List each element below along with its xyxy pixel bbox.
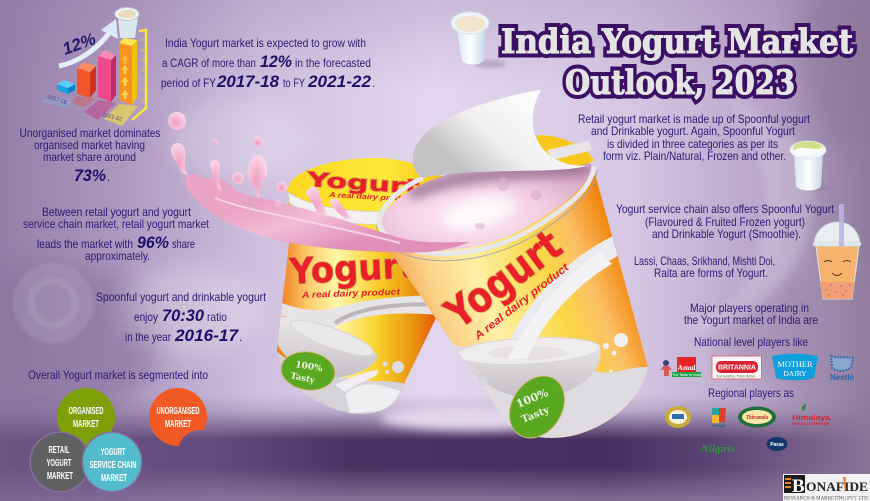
logo: Amul: The Taste of India: [672, 373, 701, 377]
cup lettering: Yogurt: [305, 167, 421, 199]
text: spoonful vs drinkable ratio: .: [239, 331, 242, 344]
logo: Parag: [712, 408, 726, 428]
logo: Amul: Amul: [678, 363, 695, 372]
text: retail share: share: [172, 238, 195, 251]
text: segmentation heading: Overall Yogurt market is segmented into: [28, 369, 208, 382]
logo: Britannia: BRITANNIA: [718, 362, 757, 372]
text: retail composition: and Drinkable yogurt. Again, Spoonful Yogurt: [591, 125, 796, 138]
text: service chain: and Drinkable Yogurt (Smoothie).: [652, 228, 801, 241]
cup lettering: Yogurt: [435, 220, 571, 339]
icon: growth bar chart with yogurt cup: [40, 8, 146, 126]
text: retail composition: [578, 113, 811, 163]
text: major players: [684, 302, 818, 327]
milk droplets: [335, 361, 404, 392]
icon: growth bar chart with yogurt cup: 2021-22: [102, 112, 123, 123]
text: CAGR growth: a CAGR of more than: [162, 57, 256, 70]
text: major players: the Yogurt market of India are: [684, 314, 818, 327]
text: retail share: leads the market with: [37, 238, 133, 251]
text: CAGR growth: [161, 37, 375, 91]
left yogurt cup: [277, 158, 442, 414]
text: CAGR growth: in the forecasted: [295, 57, 371, 70]
logo: Parag: PARAG: [713, 424, 726, 428]
text: retail share: service chain market, retail yogurt market: [23, 218, 210, 231]
circle: unorganised market: [149, 388, 207, 446]
logo: Bonafide: B: [792, 476, 805, 497]
logo: Thirumala: [738, 406, 776, 428]
text: spoonful vs drinkable ratio: enjoy: [134, 311, 158, 324]
text: spoonful vs drinkable ratio: in the year: [125, 331, 171, 344]
text: retail composition: form viz. Plain/Natural, Frozen and other.: [603, 150, 786, 163]
badge: 100% tasty: [498, 366, 576, 448]
text: regional players: Regional players as: [708, 387, 794, 400]
text: spoonful vs drinkable ratio: ratio: [207, 311, 227, 324]
logo: Mother Dairy: DAIRY: [783, 369, 807, 378]
badge: 100% tasty: Tasty: [289, 371, 317, 386]
text: CAGR growth: India Yogurt market is expected to grow with: [165, 37, 366, 50]
peeled lid: [413, 90, 594, 178]
text: service chain: Yogurt service chain also offers Spoonful Yogurt: [616, 203, 835, 216]
logo: Bonafide: [783, 474, 870, 501]
text: spoonful vs drinkable ratio: 70:30: [162, 306, 205, 325]
title: Outlook, 2023: [565, 63, 795, 103]
text: forms of yogurt: Lassi, Chaas, Srikhand, Mishti Doi,: [634, 255, 775, 268]
text: retail share: 96%: [137, 233, 169, 252]
text: CAGR growth: period of FY: [161, 77, 216, 90]
badge: 100% tasty: [279, 348, 337, 394]
text: unorganised share: .: [107, 171, 110, 184]
text: spoonful vs drinkable ratio: 2016-17: [174, 326, 240, 345]
circle: organised market: MARKET: [73, 418, 99, 430]
right yogurt cup: A real dairy product: [472, 261, 572, 343]
circle: yogurt service chain market: SERVICE CHAIN: [90, 459, 136, 471]
text: retail composition: is divided in three categories as per its: [607, 138, 778, 151]
left yogurt cup: Yogurt: [287, 245, 416, 293]
text: CAGR growth: .: [372, 77, 375, 90]
text: CAGR growth: to FY: [283, 77, 305, 90]
title: [501, 22, 853, 103]
text: CAGR growth: 2017-18: [216, 72, 280, 91]
logo: Britannia: Eat Healthy, Think Better: [717, 374, 756, 378]
circle: yogurt service chain market: YOGURT: [100, 446, 126, 458]
logo: Mother Dairy: [772, 354, 818, 380]
circle: retail yogurt market: RETAIL: [48, 444, 70, 456]
logo: Himalaya: Himalaya: [792, 413, 831, 422]
logo: Mother Dairy: MOTHER: [778, 360, 813, 369]
logo: Himalaya: FOOD COMPANY: [792, 421, 830, 426]
logo: Paras: Paras: [770, 442, 784, 448]
text: forms of yogurt: [634, 255, 775, 280]
logo: Paras: [766, 437, 788, 451]
milk droplets: [603, 333, 628, 373]
text: retail share: approximately.: [85, 250, 150, 263]
text: unorganised share: organised market having: [34, 139, 145, 152]
right yogurt cup: [376, 159, 650, 448]
circle: retail yogurt market: MARKET: [47, 470, 73, 482]
icon: growth bar chart with yogurt cup: 12%: [60, 29, 98, 59]
icon: yogurt cup right: [790, 141, 836, 191]
yogurt surface and rim: [380, 159, 592, 250]
logo: regional emblem: [665, 406, 691, 428]
badge: 100% tasty: Tasty: [520, 404, 552, 426]
icon: yogurt cup top: [451, 12, 506, 68]
circle: organised market: ORGANISED: [68, 405, 104, 417]
text: CAGR growth: 12%: [260, 52, 292, 71]
text: unorganised share: market share around: [43, 151, 136, 164]
circle: retail yogurt market: YOGURT: [46, 457, 72, 469]
badge: 100% tasty: 100%: [514, 386, 551, 411]
milk splash: [168, 112, 470, 253]
text: spoonful vs drinkable ratio: [96, 291, 267, 345]
text: unorganised share: 73%: [74, 166, 106, 185]
logo: Nestle: [830, 356, 855, 382]
left yogurt cup: A real dairy product: [328, 190, 415, 203]
text: service chain: (Flavoured & Fruited Frozen yogurt): [645, 216, 805, 229]
circle: unorganised market: MARKET: [165, 418, 191, 430]
text: service chain: [616, 203, 835, 241]
circle: yogurt service chain market: MARKET: [101, 472, 127, 484]
text: unorganised share: [20, 127, 161, 185]
text: unorganised share: Unorganised market dominates: [20, 127, 161, 140]
logo: Amul: [661, 357, 701, 377]
text: national players: National level players like: [694, 336, 808, 349]
circle: retail yogurt market: [30, 432, 90, 492]
badge: 100% tasty: 100%: [295, 360, 324, 374]
text: CAGR growth: 2021-22: [307, 72, 372, 91]
circle: unorganised market: UNORGANISED: [156, 405, 200, 417]
logo: Nestle: Nestlé: [830, 373, 855, 382]
logo: Bonafide: ONAFIDE: [806, 479, 868, 494]
logo: Himalaya: [792, 404, 831, 426]
text: forms of yogurt: Raita are forms of Yogurt.: [654, 267, 768, 280]
logo: Nilgiris: Nilgiris: [700, 444, 735, 455]
circle: organised market: [57, 388, 115, 446]
text: spoonful vs drinkable ratio: Spoonful yogurt and drinkable yogurt: [96, 291, 267, 304]
left yogurt cup: A real dairy product: [301, 287, 401, 300]
text: retail share: Between retail yogurt and yogurt: [42, 206, 192, 219]
title: Outlook, 2023: [565, 63, 795, 103]
icon: smoothie cup: [813, 204, 861, 299]
text: major players: Major players operating in: [690, 302, 809, 315]
circle: yogurt service chain market: [82, 432, 142, 492]
text: retail share: [23, 206, 210, 263]
segment circles: [30, 388, 207, 492]
logo: Thirumala: Thirumala: [746, 415, 768, 421]
icon: growth bar chart with yogurt cup: 2017-18: [46, 94, 67, 106]
text: retail composition: Retail yogurt market is made up of Spoonful yogurt: [578, 113, 811, 126]
logo: Britannia: [712, 356, 762, 379]
